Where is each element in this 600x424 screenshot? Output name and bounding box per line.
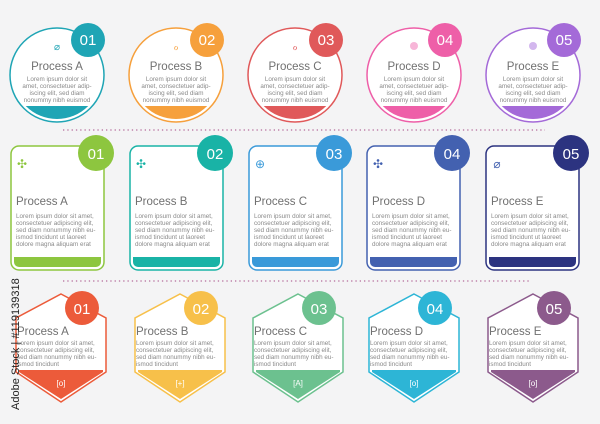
hex card B: Process B: [136, 326, 189, 338]
rect card E: 05: [563, 146, 579, 163]
hex card B: Lorem ipsum dolor sit amet,: [136, 340, 214, 347]
circle card C: iscing elit, sed diam: [268, 90, 322, 97]
hex card D: 04: [427, 301, 443, 318]
circle card A: 01: [80, 32, 96, 49]
circle card B: amet, consectetuer adip-: [141, 83, 211, 90]
circle card D: nonummy nibh euismod: [381, 97, 448, 104]
rect card B: Lorem ipsum dolor sit amet,: [135, 213, 213, 220]
hex card D: [369, 291, 459, 402]
circle card E: nonummy nibh euismod: [500, 97, 567, 104]
rect card C: ismod tincidunt ut laoreet: [254, 234, 324, 241]
rect card C: ⊕: [255, 157, 265, 171]
hex card A: 01: [74, 301, 90, 318]
rect card C: Lorem ipsum dolor sit amet,: [254, 213, 332, 220]
rect card B: sed diam nonummy nibh eu-: [135, 227, 214, 234]
circle card C: nonummy nibh euismod: [262, 97, 329, 104]
circle card C: amet, consectetuer adip-: [260, 83, 330, 90]
row 3: hexagon processes: [16, 291, 578, 402]
hex card C: ismod tincidunt: [254, 361, 296, 368]
watermark side text: Adobe Stock | #119139318: [10, 278, 22, 410]
hex card E: sed diam nonummy nibh eu-: [489, 354, 568, 361]
row 1: circle processes: [7, 23, 583, 126]
hex card A: [16, 291, 106, 402]
circle card E: 05: [556, 32, 572, 49]
rect card C: Process C: [254, 196, 307, 208]
rect card C: consectetuer adipiscing elit,: [254, 220, 332, 227]
rect card E: ismod tincidunt ut laoreet: [491, 234, 561, 241]
rect card A: 01: [88, 146, 104, 163]
rect card C: [249, 135, 352, 270]
hex card B: ismod tincidunt: [136, 361, 178, 368]
circle card E: Process E: [507, 61, 560, 73]
rect card D: [367, 135, 470, 270]
rect card E: sed diam nonummy nibh eu-: [491, 227, 570, 234]
hex card C: Lorem ipsum dolor sit amet,: [254, 340, 332, 347]
circle card B: 02: [199, 32, 215, 49]
hex card E: [o]: [529, 379, 537, 388]
rect card C: dolore magna aliquam erat: [254, 241, 329, 248]
circle card A: ⌀: [54, 42, 60, 53]
hex card E: 05: [546, 301, 562, 318]
hex card E: consectetuer adipiscing elit,: [489, 347, 567, 354]
circle card A: nonummy nibh euismod: [24, 97, 91, 104]
rect card B: 02: [207, 146, 223, 163]
rect card A: [11, 135, 114, 270]
hex card D: ismod tincidunt: [370, 361, 412, 368]
rect card C: sed diam nonummy nibh eu-: [254, 227, 333, 234]
hex card E: ismod tincidunt: [489, 361, 531, 368]
circle card A: iscing elit, sed diam: [30, 90, 84, 97]
rect card E: [486, 135, 589, 270]
rect card C: 03: [326, 146, 342, 163]
rect card A: sed diam nonummy nibh eu-: [16, 227, 95, 234]
circle card D: [364, 23, 464, 126]
rect card A: consectetuer adipiscing elit,: [16, 220, 94, 227]
rect card D: Lorem ipsum dolor sit amet,: [372, 213, 450, 220]
circle card E: amet, consectetuer adip-: [498, 83, 568, 90]
circle card A: Process A: [31, 61, 83, 73]
hex card B: [135, 291, 225, 402]
hex card D: consectetuer adipiscing elit,: [370, 347, 448, 354]
circle card B: Process B: [150, 61, 203, 73]
rect card E: Process E: [491, 196, 544, 208]
circle card A: amet, consectetuer adip-: [22, 83, 92, 90]
circle card B: ℴ: [174, 42, 179, 53]
circle card D: 04: [437, 32, 453, 49]
hex card C: sed diam nonummy nibh eu-: [254, 354, 333, 361]
rect card D: ismod tincidunt ut laoreet: [372, 234, 442, 241]
hex card C: consectetuer adipiscing elit,: [254, 347, 332, 354]
rect card D: consectetuer adipiscing elit,: [372, 220, 450, 227]
rect card D: ✣: [373, 157, 383, 171]
circle card E: Lorem ipsum dolor sit: [503, 76, 563, 83]
hex card C: [253, 291, 343, 402]
hex card A: Process A: [17, 326, 69, 338]
hex card B: consectetuer adipiscing elit,: [136, 347, 214, 354]
rect card B: [130, 135, 233, 270]
circle card C: Lorem ipsum dolor sit: [265, 76, 325, 83]
hex card A: sed diam nonummy nibh eu-: [17, 354, 96, 361]
hex card B: 02: [193, 301, 209, 318]
circle card C: [245, 23, 345, 126]
circle card B: Lorem ipsum dolor sit: [146, 76, 206, 83]
hex card D: sed diam nonummy nibh eu-: [370, 354, 449, 361]
rect card B: consectetuer adipiscing elit,: [135, 220, 213, 227]
rect card A: ✣: [17, 157, 27, 171]
hex card C: Process C: [254, 326, 307, 338]
hex card E: [488, 291, 578, 402]
rect card E: ⌀: [493, 157, 501, 171]
rect card B: dolore magna aliquam erat: [135, 241, 210, 248]
circle card C: 03: [318, 32, 334, 49]
circle card B: nonummy nibh euismod: [143, 97, 210, 104]
circle card E: iscing elit, sed diam: [506, 90, 560, 97]
hex card D: Lorem ipsum dolor sit amet,: [370, 340, 448, 347]
rect card D: 04: [444, 146, 460, 163]
rect card E: Lorem ipsum dolor sit amet,: [491, 213, 569, 220]
hex card E: Process E: [489, 326, 542, 338]
rect card B: ✣: [136, 157, 146, 171]
rect card A: dolore magna aliquam erat: [16, 241, 91, 248]
circle card B: [126, 23, 226, 126]
hex card C: [A]: [293, 379, 303, 388]
rect card D: sed diam nonummy nibh eu-: [372, 227, 451, 234]
rect card D: dolore magna aliquam erat: [372, 241, 447, 248]
circle card B: iscing elit, sed diam: [149, 90, 203, 97]
row 2: rounded rectangle processes: [11, 135, 589, 270]
hex card A: consectetuer adipiscing elit,: [17, 347, 95, 354]
hex card B: sed diam nonummy nibh eu-: [136, 354, 215, 361]
rect card A: ismod tincidunt ut laoreet: [16, 234, 86, 241]
rect card A: Lorem ipsum dolor sit amet,: [16, 213, 94, 220]
circle card A: Lorem ipsum dolor sit: [27, 76, 87, 83]
hex card D: Process D: [370, 326, 423, 338]
circle card C: ℴ: [293, 42, 298, 53]
hex card C: 03: [311, 301, 327, 318]
rect card B: ismod tincidunt ut laoreet: [135, 234, 205, 241]
rect card B: Process B: [135, 196, 188, 208]
hex card A: ismod tincidunt: [17, 361, 59, 368]
circle card D: Process D: [387, 61, 441, 73]
hex card A: Lorem ipsum dolor sit amet,: [17, 340, 95, 347]
circle card D: Lorem ipsum dolor sit: [384, 76, 444, 83]
circle card E: [483, 23, 583, 126]
hex card D: [o]: [410, 379, 418, 388]
rect card E: dolore magna aliquam erat: [491, 241, 566, 248]
circle card D: iscing elit, sed diam: [387, 90, 441, 97]
hex card E: Lorem ipsum dolor sit amet,: [489, 340, 567, 347]
circle card A: [7, 23, 107, 126]
rect card D: Process D: [372, 196, 425, 208]
rect card E: consectetuer adipiscing elit,: [491, 220, 569, 227]
hex card A: [o]: [57, 379, 65, 388]
circle card D: amet, consectetuer adip-: [379, 83, 449, 90]
rect card A: Process A: [16, 196, 68, 208]
hex card B: [+]: [175, 379, 185, 388]
circle card C: Process C: [268, 61, 322, 73]
